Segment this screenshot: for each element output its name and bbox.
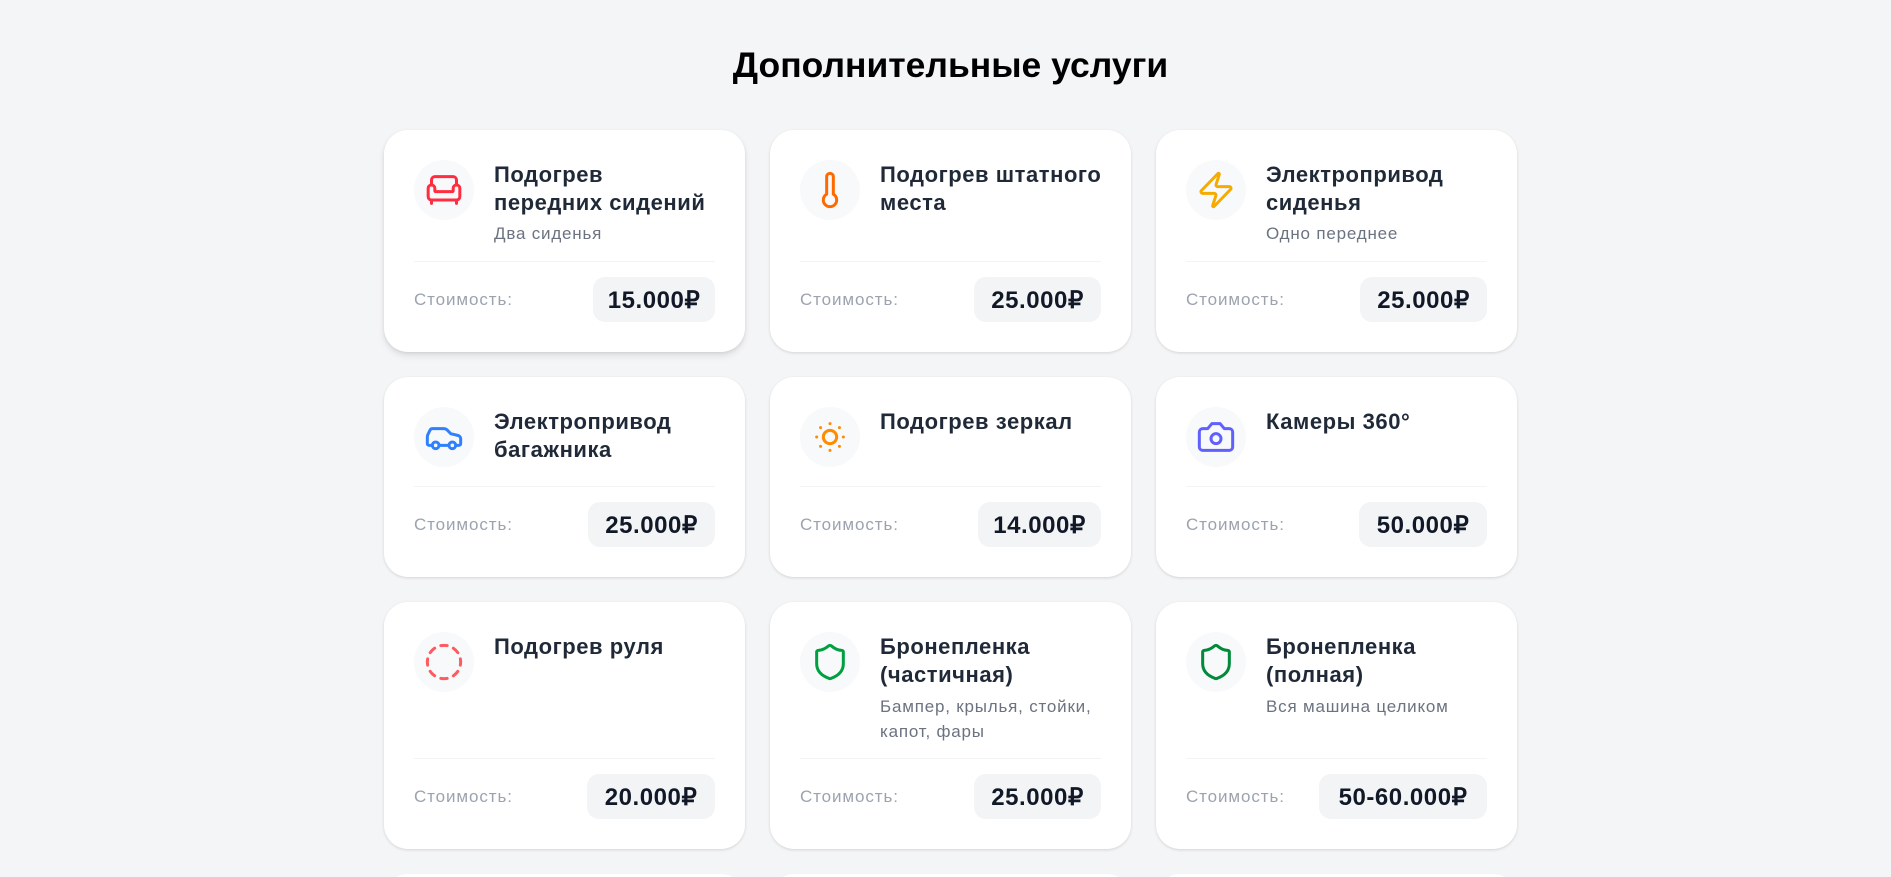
- heading: Подогрев зеркал: [880, 409, 1073, 434]
- heading: Подогрев: [494, 162, 603, 187]
- icon: camera: [1186, 407, 1246, 467]
- heading: Подогрев руля: [494, 634, 664, 659]
- heading: Бронепленка: [880, 634, 1030, 659]
- price: [1359, 502, 1487, 547]
- heading: [494, 162, 705, 215]
- price: 25.000₽: [1377, 287, 1470, 314]
- heading: [494, 409, 671, 462]
- panel: next row card 3 top edge: [1169, 874, 1504, 877]
- panel: electric seat: [1156, 130, 1517, 352]
- cost label: Стоимость:: [414, 787, 513, 806]
- panel: full film: [1156, 602, 1517, 849]
- heading: [1266, 634, 1416, 687]
- heading: Подогрев штатного: [880, 162, 1101, 187]
- heading: (частичная): [880, 662, 1013, 687]
- price: 25.000₽: [605, 512, 698, 539]
- icon: shield: [1186, 632, 1246, 692]
- cost label: Стоимость:: [1186, 290, 1285, 309]
- cost label: Стоимость:: [414, 515, 513, 534]
- panel: regular seat heating: [770, 130, 1131, 352]
- description: Два сиденья: [494, 224, 602, 243]
- price: [974, 774, 1101, 819]
- heading: Камеры 360°: [1266, 409, 1410, 434]
- price: 14.000₽: [993, 512, 1086, 539]
- heading: (полная): [1266, 662, 1364, 687]
- heading: [880, 162, 1101, 215]
- price: [593, 277, 715, 322]
- icon: thermometer: [800, 160, 860, 220]
- icon: shield: [800, 632, 860, 692]
- icon: car: [414, 407, 474, 467]
- heading: [880, 634, 1030, 687]
- panel: partial film: [770, 602, 1131, 849]
- heading: места: [880, 190, 946, 215]
- price: [978, 502, 1101, 547]
- cost label: Стоимость:: [1186, 515, 1285, 534]
- panel: 360 cameras: [1156, 377, 1517, 577]
- price: 50.000₽: [1377, 512, 1469, 539]
- cost label: Стоимость:: [1186, 787, 1285, 806]
- panel: seat heating: [384, 130, 745, 352]
- price: 25.000₽: [991, 287, 1084, 314]
- panel: steering wheel heating: [384, 602, 745, 849]
- cost label: Стоимость:: [800, 515, 899, 534]
- description: Бампер, крылья, стойки,: [880, 697, 1092, 716]
- panel: next row card 1 top edge: [397, 874, 732, 877]
- icon: sun: [800, 407, 860, 467]
- price: 20.000₽: [605, 784, 697, 811]
- heading: Бронепленка: [1266, 634, 1416, 659]
- title: Дополнительные услуги: [733, 45, 1168, 85]
- panel: electric trunk: [384, 377, 745, 577]
- heading: Электропривод: [494, 409, 671, 434]
- heading: багажника: [494, 437, 612, 462]
- price: [587, 774, 715, 819]
- panel: mirror heating: [770, 377, 1131, 577]
- cost label: Стоимость:: [800, 290, 899, 309]
- cost label: Стоимость:: [414, 290, 513, 309]
- description: Одно переднее: [1266, 224, 1398, 243]
- heading: сиденья: [1266, 190, 1361, 215]
- price: [588, 502, 715, 547]
- price: [974, 277, 1101, 322]
- price: 15.000₽: [608, 287, 700, 314]
- heading: Электропривод: [1266, 162, 1443, 187]
- description: Вся машина целиком: [1266, 697, 1449, 716]
- icon: sofa: [414, 160, 474, 220]
- icon: dashed circle: [414, 632, 474, 692]
- price: [1360, 277, 1487, 322]
- heading: передних сидений: [494, 190, 705, 215]
- heading: [1266, 162, 1443, 215]
- price: 25.000₽: [991, 784, 1084, 811]
- description: [880, 697, 1092, 741]
- price: [1319, 774, 1487, 819]
- price: 50-60.000₽: [1339, 784, 1467, 811]
- panel: next row card 2 top edge: [783, 874, 1118, 877]
- cost label: Стоимость:: [800, 787, 899, 806]
- icon: lightning: [1186, 160, 1246, 220]
- description: капот, фары: [880, 722, 985, 741]
